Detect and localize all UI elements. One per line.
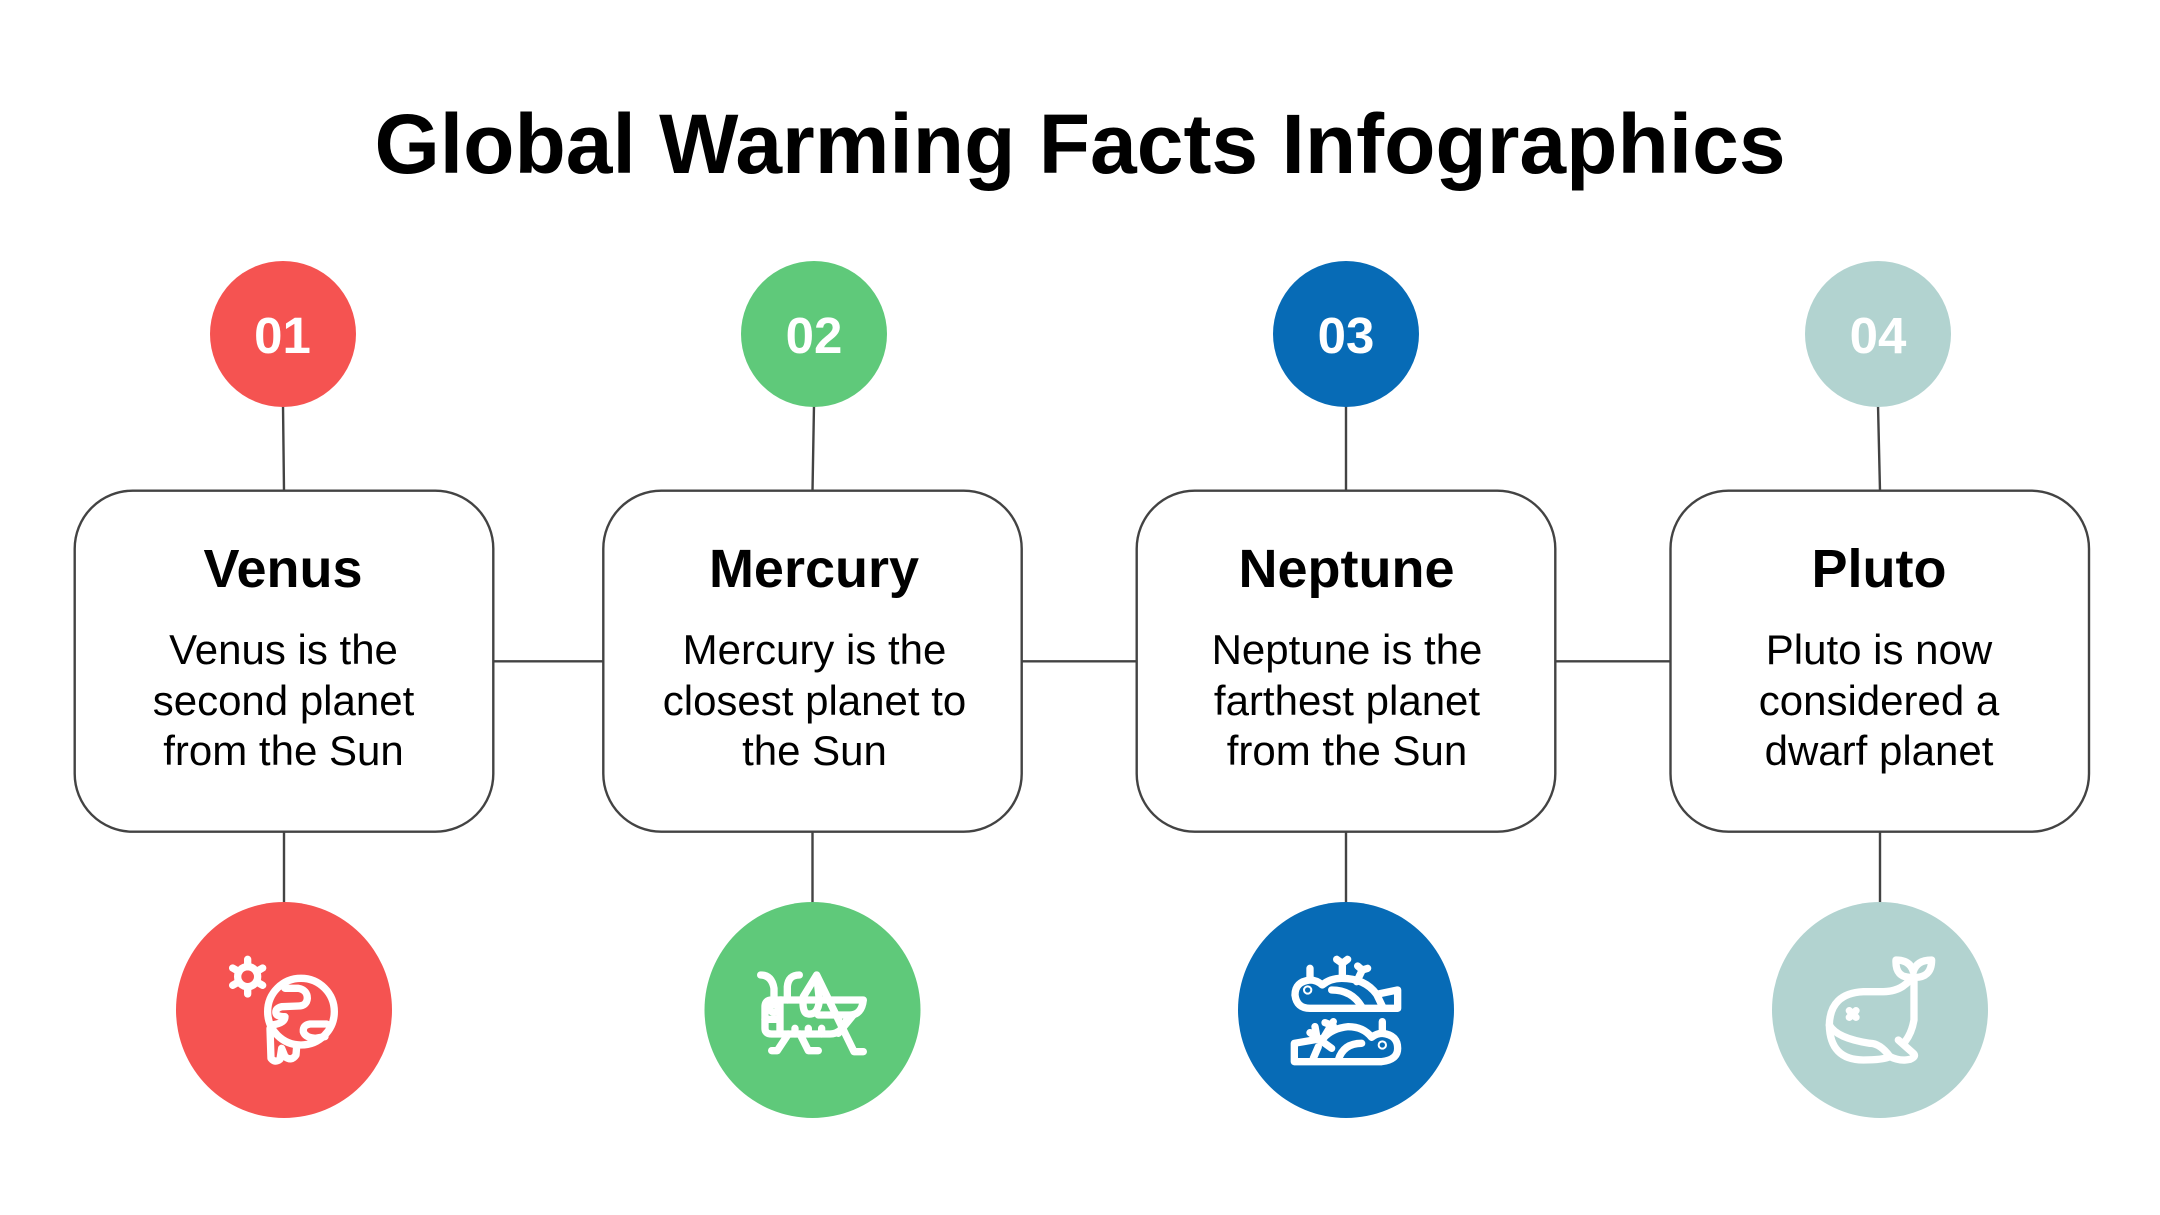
panel: Venus [75, 261, 493, 1118]
number badge 02 [741, 261, 887, 407]
card: Pluto: Pluto is now [1766, 626, 1993, 673]
card: Neptune: Neptune [1238, 539, 1454, 599]
icon: dead fish [1238, 902, 1454, 1118]
panel: Pluto [1670, 261, 2089, 1118]
card: Venus: from the Sun [163, 727, 404, 774]
number badge 04 [1805, 261, 1951, 407]
card: Venus: second planet [153, 677, 415, 724]
number badge 02: 02 [786, 307, 842, 364]
icon: whale [1772, 902, 1988, 1118]
number badge 04: 04 [1850, 307, 1907, 364]
number badge 03: 03 [1318, 307, 1374, 364]
card: Mercury: the Sun [742, 727, 887, 774]
title: Global Warming Facts Infographics [374, 97, 1786, 191]
card: Venus: Venus is the [169, 626, 398, 673]
card: Venus: Venus [203, 539, 363, 599]
card: Neptune [1137, 491, 1555, 832]
panel: Neptune [1137, 261, 1555, 1118]
card: Mercury: Mercury is the [683, 626, 946, 673]
horizontal connectors [283, 405, 1880, 905]
number badge 01: 01 [254, 307, 311, 364]
icon: grasshopper [704, 902, 920, 1118]
card: Mercury: Mercury [709, 539, 919, 599]
card: Neptune: Neptune is the [1212, 626, 1482, 673]
card: Neptune: farthest planet [1214, 677, 1480, 724]
card: Neptune: from the Sun [1227, 727, 1467, 774]
card: Mercury [603, 491, 1022, 832]
icon: melting planet and sun [176, 902, 392, 1118]
card: Mercury: closest planet to [663, 677, 966, 724]
card: Venus [75, 491, 493, 832]
card: Pluto [1670, 491, 2089, 832]
number badge 03 [1273, 261, 1419, 407]
panel: Mercury [603, 261, 1022, 1118]
card: Pluto: dwarf planet [1765, 727, 1994, 774]
card: Pluto: Pluto [1812, 539, 1946, 599]
card: Pluto: considered a [1759, 677, 2000, 724]
number badge 01 [210, 261, 356, 407]
